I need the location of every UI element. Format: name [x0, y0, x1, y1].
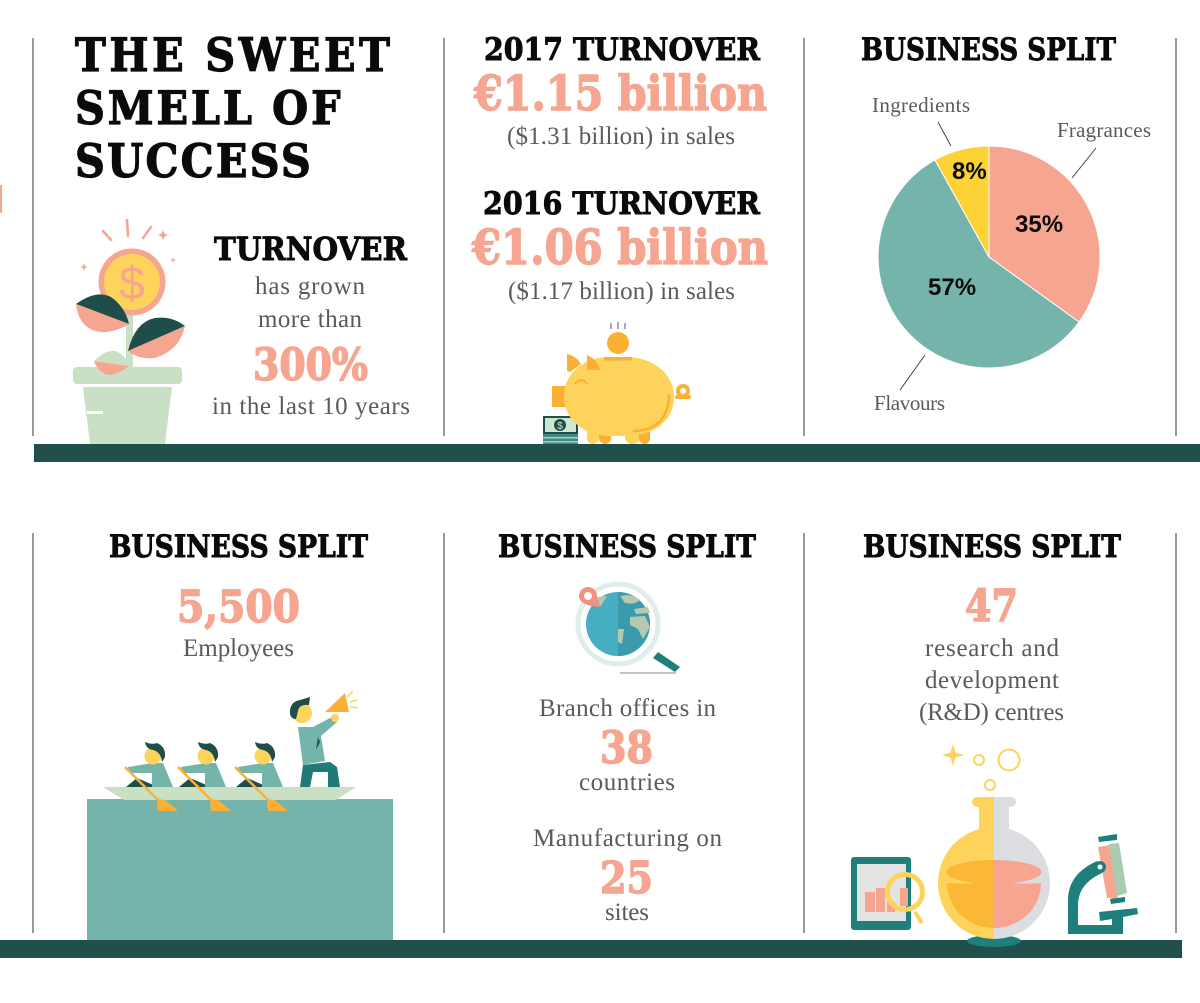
offices text — [533, 695, 722, 926]
2016 turnover — [471, 186, 768, 305]
icon: piggy bank — [543, 322, 691, 444]
pie chart: Flavours — [874, 391, 945, 415]
heading: business split: BUSINESS SPLIT — [861, 32, 1116, 68]
R&D text: 47 — [965, 581, 1018, 632]
offices text: Manufacturing on — [533, 825, 722, 852]
offices text: 25 — [600, 853, 653, 904]
title: SUCCESS — [75, 135, 311, 189]
turnover growth text: in the last 10 years — [212, 393, 410, 420]
pie chart: 35% — [1015, 211, 1063, 238]
2016 turnover: €1.06 billion — [471, 220, 768, 276]
R&D text: development — [925, 667, 1059, 694]
turnover growth text: has grown — [255, 273, 366, 300]
2016 turnover: ($1.17 billion) in sales — [508, 278, 735, 305]
pie chart — [872, 93, 1151, 415]
icon: flask — [938, 744, 1050, 947]
pie chart: Fragrances — [1057, 118, 1151, 142]
title: THE SWEET — [75, 29, 390, 83]
2017 turnover — [473, 32, 767, 150]
employees panel text: 5,500 — [177, 582, 300, 633]
employees panel text: Employees — [183, 635, 294, 662]
R&D text — [863, 529, 1121, 726]
pie chart: 57% — [928, 274, 976, 301]
icon: money plant: $ — [119, 257, 145, 309]
offices text: countries — [579, 769, 675, 796]
offices text: 38 — [600, 723, 653, 774]
2017 turnover: ($1.31 billion) in sales — [507, 123, 735, 150]
title: SMELL OF — [75, 82, 341, 136]
turnover growth text: TURNOVER — [214, 230, 407, 268]
2017 turnover: 2017 TURNOVER — [484, 32, 760, 68]
pie chart: Ingredients — [872, 93, 970, 117]
pie chart: 8% — [952, 158, 987, 185]
turnover growth text: more than — [258, 306, 362, 333]
icon: microscope — [1068, 834, 1138, 934]
offices text: Branch offices in — [539, 695, 716, 722]
R&D text: research and — [925, 635, 1060, 662]
icon: piggy bank: $ — [557, 421, 563, 432]
2016 turnover: 2016 TURNOVER — [483, 186, 760, 222]
2017 turnover: €1.15 billion — [473, 66, 767, 122]
title — [75, 29, 390, 189]
R&D text: BUSINESS SPLIT — [863, 529, 1121, 565]
R&D text: (R&D) centres — [919, 699, 1064, 726]
employees panel text — [109, 529, 368, 662]
icon: money plant — [73, 220, 185, 444]
bottom ground bar — [0, 940, 1182, 958]
icon: rowing team — [87, 691, 393, 940]
offices panel heading: BUSINESS SPLIT — [498, 529, 756, 565]
turnover growth text: 300% — [253, 340, 368, 391]
offices text: sites — [605, 899, 649, 926]
icon: tablet with chart — [851, 857, 922, 930]
icon: globe and magnifier — [578, 584, 680, 674]
top ground bar — [34, 444, 1200, 462]
employees panel text: BUSINESS SPLIT — [109, 529, 368, 565]
turnover growth text — [212, 230, 410, 420]
